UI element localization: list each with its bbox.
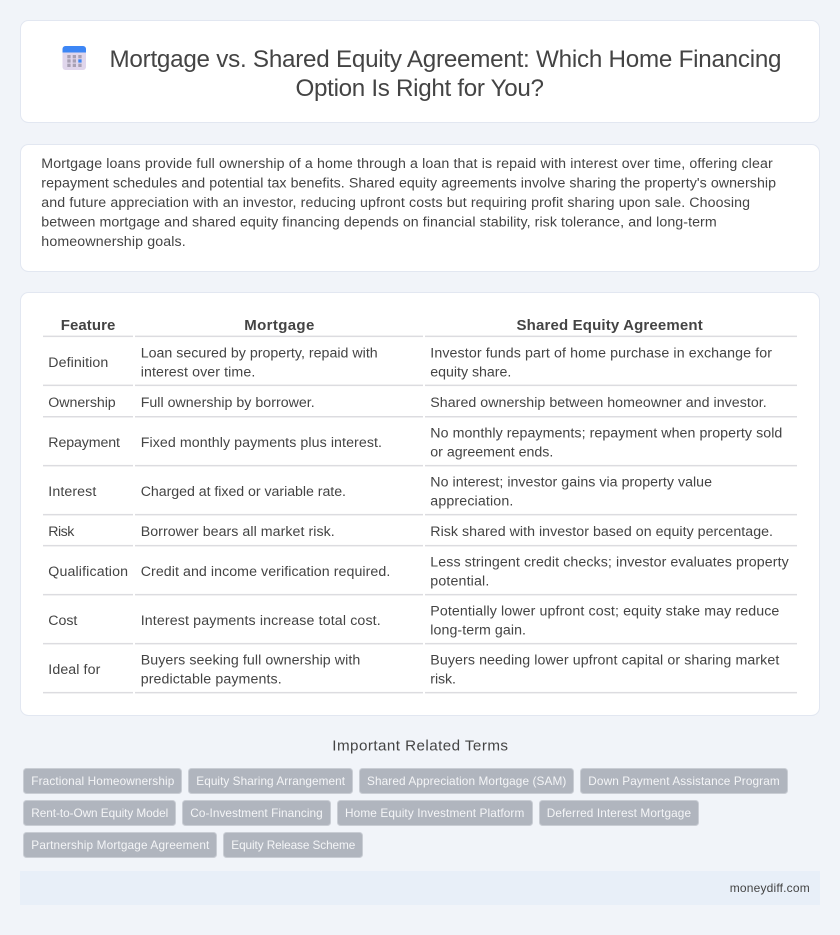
row: definition	[48, 346, 772, 380]
tags: related terms	[24, 768, 788, 858]
panel: introduction	[20, 144, 820, 272]
title: Mortgage vs. Shared Equity Agreement: Which Home Financing	[110, 46, 782, 73]
tags: related terms: Rent-to-Own Equity Model	[31, 806, 168, 820]
tags: related terms: Fractional Homeownership	[31, 774, 175, 788]
row: definition: Investor funds part of home purchase in exchange for	[430, 346, 772, 362]
text block: introduction	[41, 156, 776, 250]
table: header: Feature	[61, 317, 115, 334]
icon: calendar	[62, 46, 86, 70]
row: interest: appreciation.	[430, 494, 513, 510]
text block: introduction: Mortgage loans provide full ownership of a home through a loan that is repaid with interest over time, offering clear	[41, 156, 773, 172]
title	[110, 46, 782, 102]
row: ownership: Ownership	[48, 395, 116, 411]
row: interest	[48, 474, 712, 510]
table: row lines	[43, 336, 797, 693]
text block: introduction: and future appreciation with an investor, reducing upfront costs but requiring profit sharing upon sale. Choosing	[41, 195, 750, 211]
row: definition: equity share.	[430, 364, 511, 380]
row: risk: Risk	[48, 524, 75, 540]
row: interest: Charged at fixed or variable rate.	[141, 484, 346, 500]
table: header	[61, 317, 703, 334]
tags: related terms: Equity Release Scheme	[231, 838, 356, 852]
text block: introduction: repayment schedules and potential tax benefits. Shared equity agreements involve sharing the property's ownership	[41, 176, 776, 192]
table: header: Shared Equity Agreement	[516, 317, 703, 334]
panel: comparison table	[20, 292, 820, 716]
tags: related terms: Equity Sharing Arrangement	[196, 774, 346, 788]
row: risk: Borrower bears all market risk.	[141, 524, 335, 540]
tags: related terms: Deferred Interest Mortgage	[547, 806, 691, 820]
panel: title card	[20, 20, 820, 122]
row: interest: Interest	[48, 484, 96, 500]
text block: introduction: homeownership goals.	[41, 234, 186, 250]
row: ownership	[48, 395, 767, 411]
row: definition: interest over time.	[141, 364, 255, 380]
row: qualification	[48, 554, 790, 590]
row: risk: Risk shared with investor based on equity percentage.	[430, 524, 773, 540]
row: ideal for: Ideal for	[48, 662, 101, 678]
row: interest: No interest; investor gains via property value	[430, 474, 712, 490]
row: ideal for: predictable payments.	[141, 672, 282, 688]
row: repayment	[48, 426, 782, 460]
text block: introduction: between mortgage and shared equity financing depends on financial stability, risk tolerance, and long-term	[41, 214, 717, 230]
row: risk	[48, 524, 773, 540]
tags: related terms: Down Payment Assistance Program	[588, 774, 780, 788]
footer: moneydiff.com	[730, 881, 810, 895]
row: qualification: Credit and income verification required.	[141, 564, 390, 580]
row: ownership: Full ownership by borrower.	[141, 395, 315, 411]
row: cost: Cost	[48, 613, 77, 629]
row: qualification: potential.	[430, 574, 489, 590]
row: repayment: Fixed monthly payments plus interest.	[141, 435, 382, 451]
row: repayment: Repayment	[48, 435, 120, 451]
row: ownership: Shared ownership between homeowner and investor.	[430, 395, 767, 411]
row: qualification: Less stringent credit checks; investor evaluates property	[430, 554, 790, 570]
table: header: Mortgage	[244, 317, 314, 334]
row: ideal for: Buyers seeking full ownership with	[141, 652, 360, 668]
row: cost	[48, 604, 779, 638]
row: cost: Interest payments increase total cost.	[141, 613, 381, 629]
row: ideal for: Buyers needing lower upfront capital or sharing market	[430, 652, 779, 668]
row: qualification: Qualification	[48, 564, 128, 580]
row: cost: long-term gain.	[430, 622, 526, 638]
row: ideal for: risk.	[430, 672, 456, 688]
row: definition: Definition	[48, 355, 108, 371]
tags: related terms: Home Equity Investment Platform	[345, 806, 524, 820]
heading: related terms: Important Related Terms	[332, 738, 508, 754]
row: definition: Loan secured by property, repaid with	[141, 346, 378, 362]
row: repayment: No monthly repayments; repayment when property sold	[430, 426, 782, 442]
row: cost: Potentially lower upfront cost; equity stake may reduce	[430, 604, 779, 620]
row: ideal for	[48, 652, 779, 688]
tags: related terms: Co-Investment Financing	[190, 806, 323, 820]
row: repayment: or agreement ends.	[430, 444, 553, 460]
title: Option Is Right for You?	[296, 75, 544, 102]
tags: related terms: Partnership Mortgage Agreement	[31, 838, 210, 852]
footer	[20, 871, 820, 905]
tags: related terms: Shared Appreciation Mortgage (SAM)	[367, 774, 566, 788]
